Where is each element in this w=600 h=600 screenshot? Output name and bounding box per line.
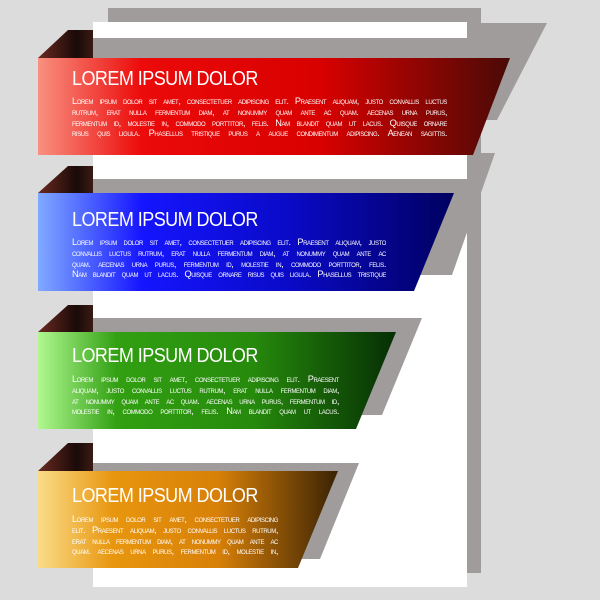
orange title: LOREM IPSUM DOLOR [72,485,258,507]
green body: at nonummy quam ante ac quam. aecenas urna purus, fermentum id, [72,396,339,406]
blue body: quam. aecenas urna purus, fermentum id, molestie in, commodo porttitor, felis. [72,259,386,269]
red title: LOREM IPSUM DOLOR [72,68,258,90]
blue body [72,237,386,279]
orange body: elit. Praesent aliquam, justo convallis luctus rutrum, [72,525,278,535]
shadow green [93,318,422,415]
green body: molestie in, commodo porttitor, felis. Nam blandit quam ut lacus. [72,406,339,416]
blue title: LOREM IPSUM DOLOR [72,209,258,231]
red body: rutrum, erat nulla fermentum diam, at nonummy quam ante ac quam. aecenas urna purus, [72,107,447,117]
white page [93,22,467,587]
green body [72,374,339,416]
orange body [72,514,278,556]
red bar [38,58,510,155]
shadow orange [93,463,359,559]
red body: risus quis ligula. Phasellus tristique purus a augue condimentum adipiscing. Aenean sagittis. [72,128,447,138]
orange body: Lorem ipsum dolor sit amet, consectetuer adipiscing [72,514,278,524]
back page [108,8,481,573]
shadow red [93,23,547,120]
green bar [38,332,396,429]
blue bar [38,193,454,291]
folds [38,30,93,471]
green body: Lorem ipsum dolor sit amet, consectetuer adipiscing elit. Praesent [72,374,339,384]
orange bar [38,471,338,568]
blue body: Lorem ipsum dolor sit amet, consectetuer adipiscing elit. Praesent aliquam, justo [72,237,386,247]
shadow blue [93,153,495,275]
red body [72,96,447,138]
green title: LOREM IPSUM DOLOR [72,345,258,367]
red body: Lorem ipsum dolor sit amet, consectetuer adipiscing elit. Praesent aliquam, justo convallis luctus [72,96,447,106]
red body: fermentum id, molestie in, commodo porttitor, felis. Nam blandit quam ut lacus. Quisque ornare [72,118,447,128]
orange body: quam. aecenas urna purus, fermentum id, molestie in, [72,546,278,556]
green body: aliquam, justo convallis luctus rutrum, erat nulla fermentum diam, [72,385,339,395]
blue body: convallis luctus rutrum, erat nulla fermentum diam, at nonummy quam ante ac [72,248,386,258]
blue body: Nam blandit quam ut lacus. Quisque ornare risus quis ligula. Phasellus tristique [72,269,386,279]
orange body: erat nulla fermentum diam, at nonummy quam ante ac [72,536,278,546]
